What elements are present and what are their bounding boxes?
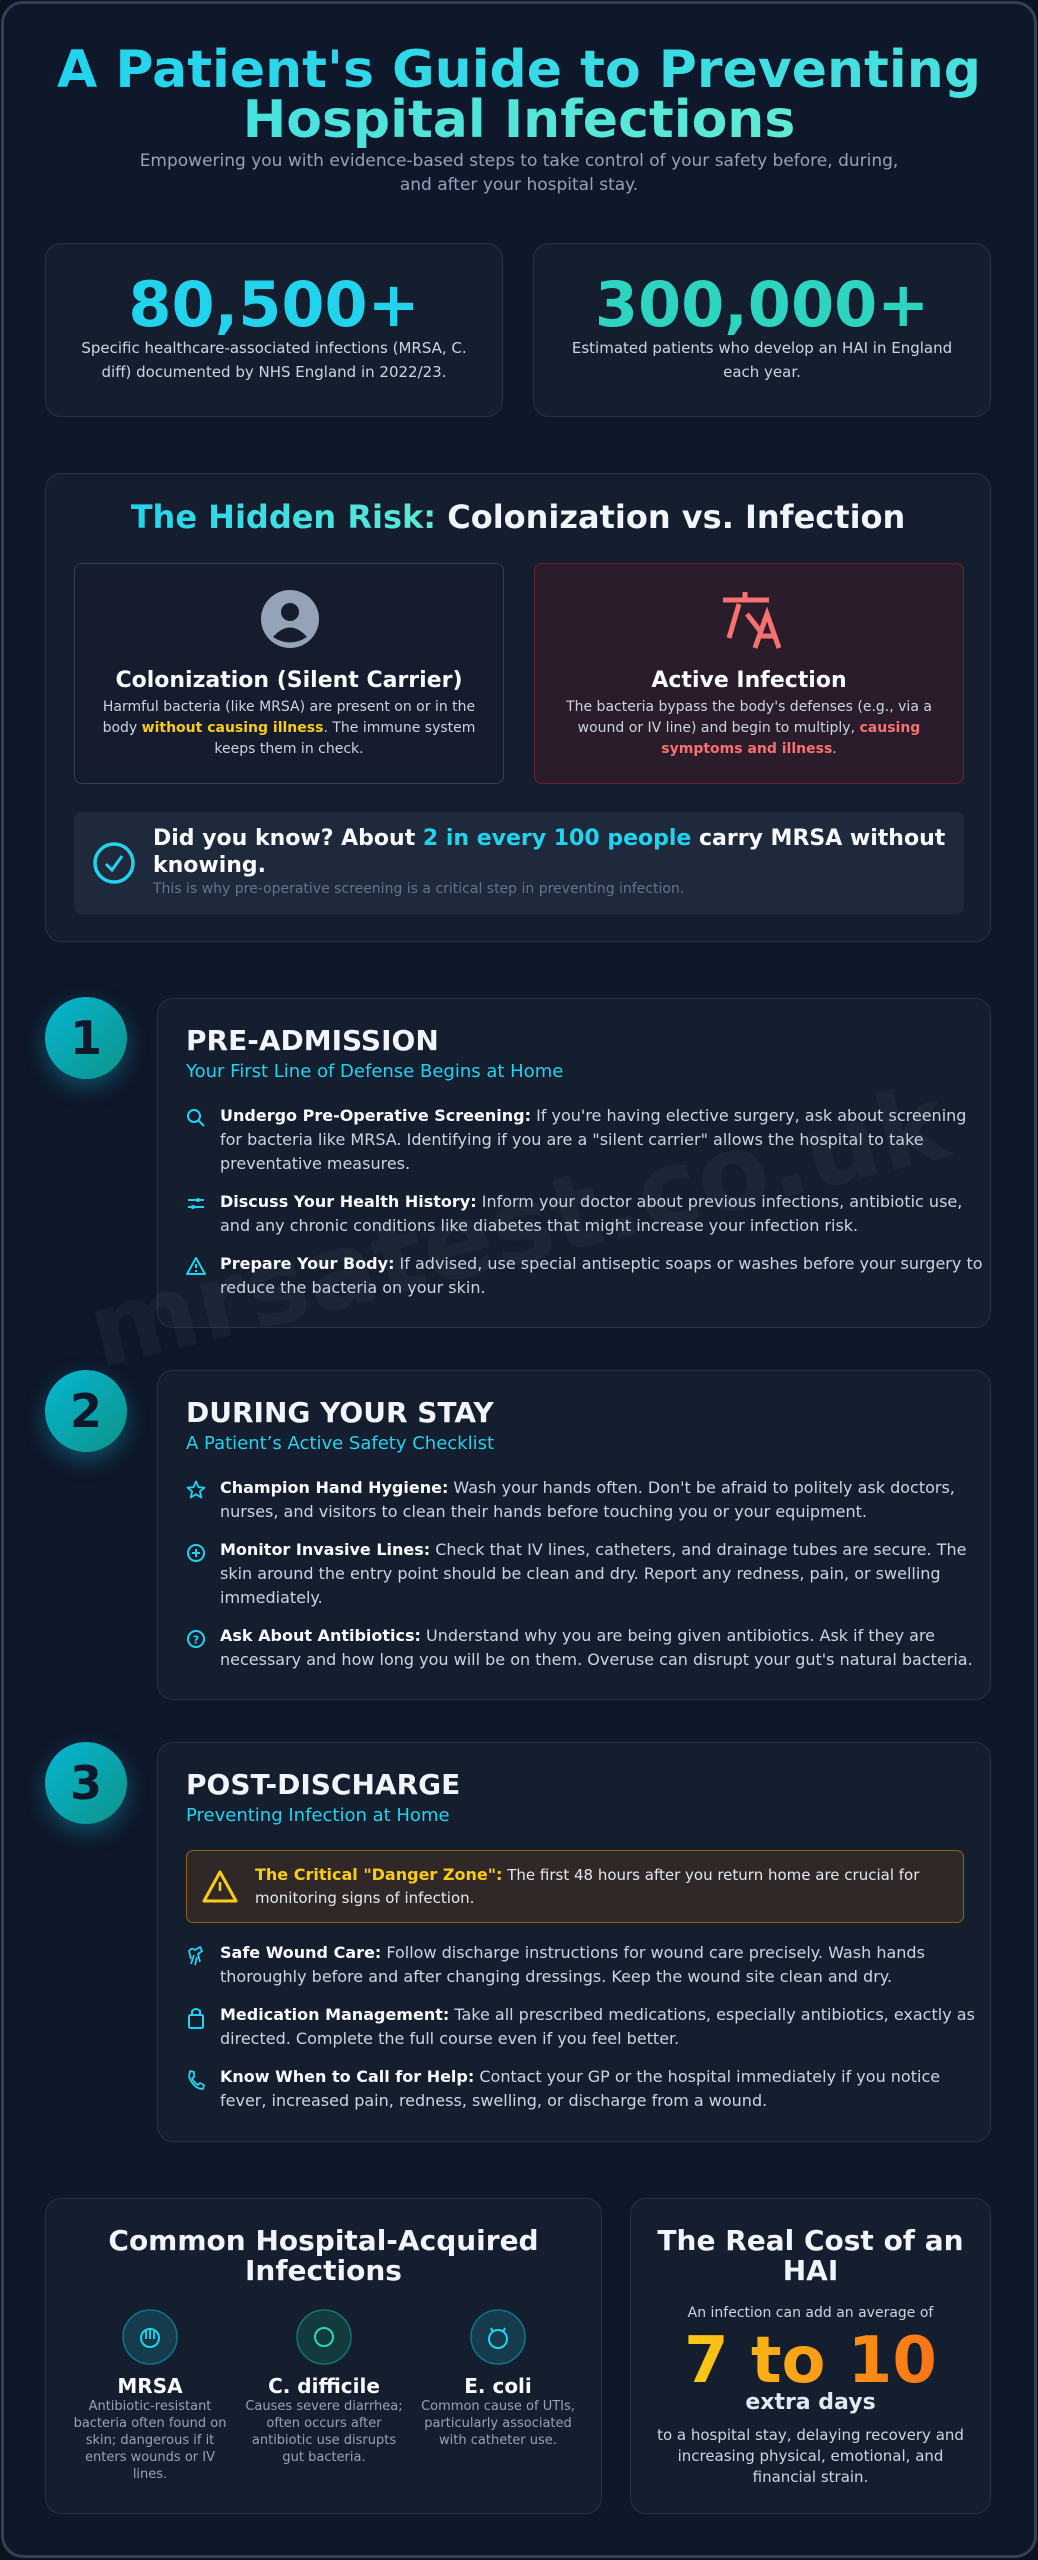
item: wound care: thoroughly before and after changing dressings. Keep the wound site clean and dry. (220, 1967, 892, 1986)
item: history (188, 1192, 962, 1235)
item: invasive lines: Monitor Invasive Lines: Check that IV lines, catheters, and drainage tubes are secure. The (220, 1540, 966, 1559)
card title: Active Infection (651, 668, 847, 693)
explanation: to a hospital stay, delaying recovery and (657, 2426, 964, 2444)
card text: wound or IV line) and begin to multiply, causing (578, 720, 920, 736)
description (245, 2399, 403, 2465)
stat description: Estimated patients who develop an HAI in England (572, 339, 952, 357)
name: C. difficile (268, 2374, 380, 2398)
stat description: each year. (723, 363, 801, 381)
subtitle: Empowering you with evidence-based steps to take control of your safety before, during, (140, 151, 898, 171)
step subtitle: Your First Line of Defense Begins at Home (186, 1061, 563, 1082)
title: Hospital Infections (243, 90, 795, 150)
callout: did you know (74, 812, 964, 914)
description: Common cause of UTIs, (421, 2399, 575, 2414)
name: E. coli (464, 2374, 532, 2398)
description: enters wounds or IV (85, 2450, 215, 2465)
subtitle: and after your hospital stay. (400, 175, 638, 195)
item: hand hygiene: nurses, and visitors to clean their hands before touching you or your equipment. (220, 1502, 867, 1521)
stat description: Specific healthcare-associated infections (MRSA, C. (81, 339, 467, 357)
panel: post-discharge (157, 1742, 991, 2142)
title (57, 40, 981, 150)
item: hand hygiene: Champion Hand Hygiene: Wash your hands often. Don't be afraid to politely ask doctors, (220, 1478, 955, 1497)
step subtitle: A Patient’s Active Safety Checklist (186, 1433, 494, 1454)
explanation: financial strain. (753, 2468, 868, 2486)
card: active infection (534, 563, 964, 784)
checklist (186, 1106, 982, 1297)
icon: check circle (93, 842, 135, 884)
item: antibiotics: necessary and how long you will be on them. Overuse can disrupt your gut's natural bacteria. (220, 1650, 973, 1669)
heading: The Real Cost of an (657, 2224, 964, 2257)
card title: Colonization (Silent Carrier) (115, 668, 463, 693)
item: history: and any chronic conditions like diabetes that might increase your infection risk. (220, 1216, 858, 1235)
description: Antibiotic-resistant (89, 2399, 211, 2414)
heading (657, 2224, 964, 2287)
checklist (186, 1478, 973, 1669)
callout text (153, 826, 945, 878)
big number: 7 to 10 (684, 2324, 937, 2398)
card: colonization (74, 563, 504, 784)
icon: E. coli (470, 2309, 526, 2365)
item: wound care: Safe Wound Care: Follow discharge instructions for wound care precisely. Wash hands (220, 1943, 925, 1962)
step badge 2 (45, 1370, 127, 1452)
description: gut bacteria. (282, 2450, 366, 2465)
step title: POST-DISCHARGE (186, 1768, 460, 1801)
item: prepare body (186, 1254, 982, 1297)
description: lines. (133, 2467, 167, 2482)
panel: real cost (630, 2198, 991, 2514)
icon: person (261, 590, 319, 648)
card text: keeps them in check. (214, 741, 364, 757)
card text (566, 699, 932, 757)
callout subtext: This is why pre-operative screening is a critical step in preventing infection. (153, 881, 684, 897)
heading: Infections (245, 2254, 402, 2287)
item: medication: directed. Complete the full course even if you feel better. (220, 2029, 679, 2048)
item: antibiotics (187, 1626, 973, 1669)
item: invasive lines: immediately. (220, 1588, 323, 1607)
item: medication (188, 2005, 975, 2048)
icon: C. difficile (296, 2309, 352, 2365)
heading: HAI (783, 2254, 838, 2287)
card text: body without causing illness. The immune system (103, 720, 475, 736)
subtitle (140, 151, 898, 195)
icon: warning (202, 1870, 238, 1902)
card text (103, 699, 475, 757)
infection: MRSA (74, 2309, 226, 2482)
step badge 2: 2 (70, 1384, 102, 1438)
panel: hidden risk (45, 473, 991, 942)
intro text: An infection can add an average of (688, 2305, 933, 2321)
stat description (81, 339, 467, 381)
step title: DURING YOUR STAY (186, 1396, 494, 1429)
callout: danger zone (186, 1850, 964, 1923)
item: antibiotics: ? (193, 1634, 199, 1646)
description: Causes severe diarrhea; (245, 2399, 403, 2414)
item: invasive lines: skin around the entry point should be clean and dry. Report any redness, pain, or swelling (220, 1564, 941, 1583)
callout text: Did you know? About 2 in every 100 people carry MRSA without (153, 826, 945, 851)
explanation (657, 2426, 964, 2486)
callout text: knowing. (153, 853, 266, 878)
panel: during your stay (157, 1370, 991, 1700)
stat description (572, 339, 952, 381)
danger text (255, 1865, 920, 1907)
description: skin; dangerous if it (86, 2433, 214, 2448)
danger text: The Critical "Danger Zone": The first 48 hours after you return home are crucial for (255, 1865, 919, 1884)
description: antibiotic use disrupts (252, 2433, 396, 2448)
item: screening: for bacteria like MRSA. Identifying if you are a "silent carrier" allows the hospital to take (220, 1130, 924, 1149)
step badge 1: 1 (70, 1011, 102, 1065)
description: bacteria often found on (74, 2416, 226, 2431)
item: hand hygiene (186, 1478, 955, 1521)
icon: MRSA (122, 2309, 178, 2365)
card text: The bacteria bypass the body's defenses (e.g., via a (566, 699, 932, 715)
icon: translate (723, 592, 782, 649)
panel: pre-admission (157, 998, 991, 1328)
item: wound care (188, 1943, 925, 1986)
stat card: 300,000+ (533, 243, 991, 417)
item: prepare body: Prepare Your Body: If advised, use special antiseptic soaps or washes before your surgery to (220, 1254, 982, 1273)
infection: C. difficile (245, 2309, 403, 2465)
heading: Common Hospital-Acquired (108, 2224, 539, 2257)
item: antibiotics: Ask About Antibiotics: Understand why you are being given antibiotics. Ask if they are (220, 1626, 935, 1645)
step title: PRE-ADMISSION (186, 1024, 439, 1057)
panel: common infections (45, 2198, 602, 2514)
title: A Patient's Guide to Preventing (57, 40, 981, 100)
checklist (188, 1943, 975, 2110)
unit: extra days (745, 2390, 876, 2415)
item: screening: preventative measures. (220, 1154, 410, 1173)
stat number: 80,500+ (128, 268, 420, 341)
item: call for help: fever, increased pain, redness, swelling, or discharge from a wound. (220, 2091, 767, 2110)
item: medication: Medication Management: Take all prescribed medications, especially antibiotics, exactly as (220, 2005, 975, 2024)
step subtitle: Preventing Infection at Home (186, 1805, 450, 1826)
heading: The Hidden Risk: Colonization vs. Infection (131, 498, 905, 536)
description: often occurs after (266, 2416, 382, 2431)
description (421, 2399, 575, 2448)
item: call for help (188, 2067, 940, 2110)
item: history: Discuss Your Health History: Inform your doctor about previous infections, antibiotic use, (220, 1192, 962, 1211)
description (74, 2399, 226, 2482)
infection: E. coli (421, 2309, 575, 2448)
item: screening: Undergo Pre-Operative Screening: If you're having elective surgery, ask about screening (220, 1106, 966, 1125)
step badge 3 (45, 1742, 127, 1824)
card text: symptoms and illness. (661, 741, 837, 757)
step badge 1 (45, 997, 127, 1079)
danger text: monitoring signs of infection. (255, 1889, 474, 1907)
item: call for help: Know When to Call for Help: Contact your GP or the hospital immediately if you notice (220, 2067, 940, 2086)
item: screening (187, 1106, 966, 1173)
watermark: mrsatest.co.uk (77, 1061, 959, 1392)
item: invasive lines (187, 1540, 966, 1607)
card text: Harmful bacteria (like MRSA) are present on or in the (103, 699, 475, 715)
description: with catheter use. (439, 2433, 557, 2448)
stat card: 80,500+ (45, 243, 503, 417)
step badge 3: 3 (70, 1756, 102, 1810)
heading (108, 2224, 539, 2287)
stat description: diff) documented by NHS England in 2022/23. (102, 363, 446, 381)
item: prepare body: reduce the bacteria on your skin. (220, 1278, 486, 1297)
description: particularly associated (424, 2416, 572, 2431)
stat number: 300,000+ (595, 268, 929, 341)
name: MRSA (117, 2374, 183, 2398)
explanation: increasing physical, emotional, and (678, 2447, 943, 2465)
